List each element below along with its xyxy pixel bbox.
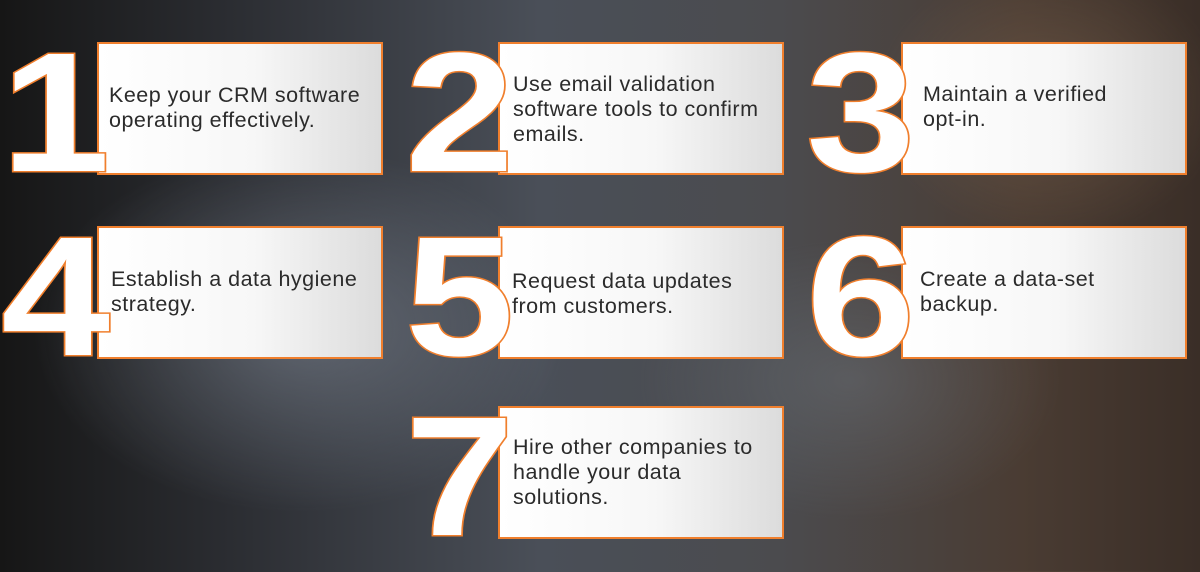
item 1 [1,18,383,208]
number 4: 4 [1,202,110,392]
text 4: strategy. [111,292,196,316]
item 6 [806,202,1187,392]
item 5 [405,202,784,392]
text 2: software tools to confirm [513,97,759,121]
text 2 [513,72,759,146]
text 4: Establish a data hygiene [111,267,357,291]
card 4 [97,226,383,359]
text 3 [923,82,1107,131]
text 4 [111,267,357,316]
text 5: from customers. [512,294,674,318]
card 5 [498,226,784,359]
card 7 [498,406,784,539]
text 1: operating effectively. [109,108,315,132]
text 7: solutions. [513,485,609,509]
text 6: Create a data-set [920,267,1095,291]
number 7: 7 [405,382,514,572]
text 3: Maintain a verified [923,82,1107,106]
card 2 [498,42,784,175]
text 6: backup. [920,292,999,316]
number 2: 2 [405,18,514,208]
item 2 [405,18,784,208]
text 1: Keep your CRM software [109,83,360,107]
number 3: 3 [806,18,915,208]
text 5 [512,269,732,318]
number 1: 1 [1,18,110,208]
card 6 [901,226,1187,359]
item 4 [1,202,383,392]
number 6: 6 [806,202,915,392]
text 6 [920,267,1095,316]
text 2: emails. [513,122,585,146]
text 5: Request data updates [512,269,732,293]
text 7 [513,435,753,509]
text 3: opt-in. [923,107,986,131]
item 7 [405,382,784,572]
item 3 [806,18,1187,208]
number 5: 5 [405,202,514,392]
text 7: Hire other companies to [513,435,753,459]
text 7: handle your data [513,460,681,484]
card 3 [901,42,1187,175]
card 1 [97,42,383,175]
text 1 [109,83,360,132]
text 2: Use email validation [513,72,715,96]
